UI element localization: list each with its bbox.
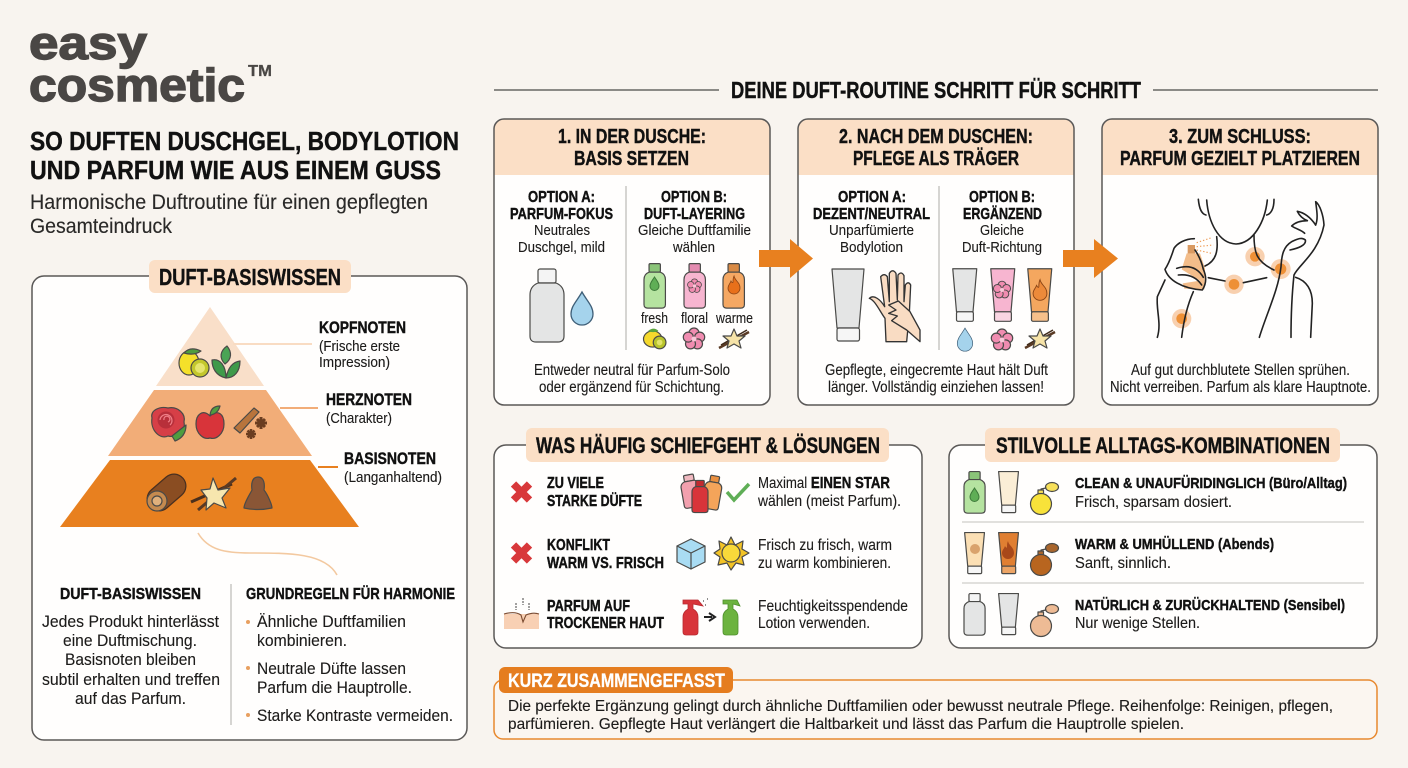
row: clean combination: Frisch, sparsam dosiert. <box>1075 494 1232 511</box>
step 1 caption <box>534 362 730 396</box>
step 2 caption: länger. Vollständig einziehen lassen! <box>828 379 1044 396</box>
step 1 caption: oder ergänzend für Schichtung. <box>539 379 724 396</box>
label: Kopfnoten <box>319 319 406 371</box>
title: UND PARFUM WIE AUS EINEM GUSS <box>30 157 441 185</box>
row: too many strong scents <box>514 473 901 513</box>
panel: step 2 <box>798 119 1074 405</box>
option B text: OPTION B: <box>969 189 1035 206</box>
text block: Grundregeln für Harmonie: GRUNDREGELN FÜR HARMONIE <box>246 584 455 603</box>
panel: Duft-Basiswissen <box>32 260 467 740</box>
option A text: Duschgel, mild <box>518 239 605 256</box>
option B text: Gleiche <box>980 222 1024 239</box>
heading: Stilvolle Alltags-Kombinationen <box>985 428 1340 462</box>
step 3 heading: 3. ZUM SCHLUSS: <box>1169 125 1311 148</box>
panel: step 1 <box>494 119 770 405</box>
title: SO DUFTEN DUSCHGEL, BODYLOTION <box>30 128 459 156</box>
row: perfume on dry skin: Lotion verwenden. <box>758 615 870 632</box>
label: Herznoten <box>326 391 412 427</box>
subtitle: Gesamteindruck <box>30 215 172 238</box>
step 3 caption <box>1110 362 1371 396</box>
row: clean combination: CLEAN & UNAUFÜRIDINGLICH (Büro/Alltag) <box>1075 475 1347 492</box>
option B text: DUFT-LAYERING <box>644 206 745 223</box>
icon: neutral tube and hands <box>832 269 920 342</box>
option A text: Neutrales <box>534 222 590 239</box>
connector curve <box>198 533 337 575</box>
row: warm vs fresh conflict: zu warm kombinieren. <box>758 555 891 572</box>
row: natural combination: NATÜRLICH & ZURÜCKHALTEND (Sensibel) <box>1075 597 1345 614</box>
step 1 caption: Entweder neutral für Parfum-Solo <box>534 362 730 379</box>
icon: three scented bottles with labels: warme <box>715 310 753 327</box>
summary text: parfümieren. Gepflegte Haut verlängert die Haltbarkeit und lässt das Parfum die Hauptrolle spielen. <box>508 716 1184 733</box>
row: perfume on dry skin <box>504 598 908 635</box>
panel: step 3 <box>1102 119 1378 405</box>
option A text <box>510 189 613 256</box>
icon: lemon and mint <box>179 346 240 378</box>
summary text: Die perfekte Ergänzung gelingt durch ähnliche Duftfamilien oder bewusst neutrale Pflege. Reihenfolge: Reinigen, pflegen, <box>508 698 1333 715</box>
option A text: OPTION A: <box>528 189 595 206</box>
step 3 heading <box>1120 125 1360 170</box>
label: Kopfnoten: KOPFNOTEN <box>319 319 406 337</box>
option B text: wählen <box>672 239 715 256</box>
pyramid chart <box>60 307 359 527</box>
row: too many strong scents: wählen (meist Parfum). <box>757 493 901 510</box>
section heading: Deine Duft-Routine: DEINE DUFT-ROUTINE SCHRITT FÜR SCHRITT <box>731 77 1141 103</box>
label: Herznoten: (Charakter) <box>326 411 392 427</box>
option A text: Unparfümierte <box>829 222 914 239</box>
option B text <box>962 189 1042 256</box>
text block: Grundregeln für Harmonie <box>246 584 455 725</box>
option B text: Duft-Richtung <box>962 239 1042 256</box>
label: Basisnoten: (Langanhaltend) <box>344 470 442 486</box>
panel: common mistakes and solutions <box>494 428 922 648</box>
row: warm combination <box>965 533 1274 576</box>
icon: wood, vanilla and amber <box>147 477 272 511</box>
text block: Duft-Basiswissen: auf das Parfum. <box>75 690 186 708</box>
icon: three scented bottles with labels <box>641 264 753 349</box>
heading: Was häufig schiefgeht: WAS HÄUFIG SCHIEFGEHT & LÖSUNGEN <box>536 433 880 458</box>
panel: everyday combinations <box>949 428 1377 648</box>
illustration: perfume application points on neck and wrists <box>1157 199 1324 337</box>
row: warm vs fresh conflict: Frisch zu frisch, warm <box>758 537 892 554</box>
text block: Duft-Basiswissen: DUFT-BASISWISSEN <box>60 586 201 603</box>
arrow: step 1 to 2 <box>759 239 813 278</box>
icon: three scented bottles with labels: fresh <box>641 310 668 327</box>
option A text: PARFUM-FOKUS <box>510 206 613 223</box>
label: Kopfnoten: Impression) <box>319 355 390 371</box>
heading: Duft-Basiswissen: DUFT-BASISWISSEN <box>159 264 341 290</box>
label: Kopfnoten: (Frische erste <box>319 339 400 355</box>
option A text <box>813 189 930 256</box>
subtitle <box>30 191 428 238</box>
heading: Was häufig schiefgeht <box>526 428 889 462</box>
step 1 heading: 1. IN DER DUSCHE: <box>558 125 706 148</box>
step 2 heading <box>839 125 1033 170</box>
row: clean combination <box>964 472 1347 514</box>
text block: Grundregeln für Harmonie: Ähnliche Duftfamilien <box>257 613 406 631</box>
text block: Duft-Basiswissen <box>42 586 220 708</box>
row: warm vs fresh conflict: KONFLIKT <box>547 537 610 554</box>
row: perfume on dry skin: Feuchtigkeitsspendende <box>758 598 908 615</box>
row: warm combination: WARM & UMHÜLLEND (Abends) <box>1075 536 1274 553</box>
text block: Grundregeln für Harmonie: Starke Kontraste vermeiden. <box>257 707 453 725</box>
step 1 heading <box>558 125 706 170</box>
step 2 caption <box>825 362 1049 396</box>
logo: easy cosmetic: cosmetic <box>29 59 245 111</box>
logo: easy cosmetic: easy <box>29 17 147 69</box>
heading: Stilvolle Alltags-Kombinationen: STILVOLLE ALLTAGS-KOMBINATIONEN <box>996 433 1330 458</box>
icon: neutral bottle and water drop <box>530 269 593 342</box>
row: natural combination <box>964 594 1345 636</box>
text block: Duft-Basiswissen: Jedes Produkt hinterlässt <box>42 613 219 631</box>
arrow: step 2 to 3 <box>1063 239 1118 278</box>
summary text <box>508 698 1333 733</box>
step 2 heading: PFLEGE ALS TRÄGER <box>853 147 1019 170</box>
label: Basisnoten <box>344 450 442 486</box>
option A text: DEZENT/NEUTRAL <box>813 206 930 223</box>
option B text <box>638 189 751 256</box>
step 1 heading: BASIS SETZEN <box>574 147 689 170</box>
title <box>30 128 459 185</box>
option A text: OPTION A: <box>838 189 906 206</box>
option B text: Gleiche Duftfamilie <box>638 222 751 239</box>
logo: easy cosmetic: TM <box>248 63 272 80</box>
logo: easy cosmetic <box>29 17 272 111</box>
row: too many strong scents: Maximal EINEN STAR <box>758 475 890 492</box>
text block: Grundregeln für Harmonie: Neutrale Düfte lassen <box>257 660 406 678</box>
subtitle: Harmonische Duftroutine für einen gepflegten <box>30 191 428 214</box>
option B text: OPTION B: <box>661 189 727 206</box>
row: too many strong scents: ZU VIELE <box>547 475 604 492</box>
text block: Grundregeln für Harmonie: kombinieren. <box>257 632 347 650</box>
step 3 caption: Nicht verreiben. Parfum als klare Hauptnote. <box>1110 379 1371 396</box>
panel: summary <box>494 667 1377 739</box>
row: warm vs fresh conflict: WARM VS. FRISCH <box>547 555 664 572</box>
icon: rose, apple, cinnamon and star anise <box>152 406 267 441</box>
option B text: ERGÄNZEND <box>963 206 1042 223</box>
step 3 caption: Auf gut durchblutete Stellen sprühen. <box>1131 362 1350 379</box>
label: Basisnoten: BASISNOTEN <box>344 450 436 468</box>
icon: three scented bottles with labels: floral <box>681 310 708 327</box>
label: Herznoten: HERZNOTEN <box>326 391 412 409</box>
text block: Duft-Basiswissen: subtil erhalten und treffen <box>42 671 220 689</box>
heading: Duft-Basiswissen <box>149 260 351 293</box>
row: too many strong scents: STARKE DÜFTE <box>547 493 642 510</box>
summary badge: KURZ ZUSAMMENGEFASST <box>508 671 725 692</box>
row: warm combination: Sanft, sinnlich. <box>1075 555 1171 572</box>
option A text: Bodylotion <box>840 239 903 256</box>
row: natural combination: Nur wenige Stellen. <box>1075 615 1200 632</box>
text block: Grundregeln für Harmonie: Parfum die Hauptrolle. <box>257 679 412 697</box>
row: perfume on dry skin: PARFUM AUF <box>547 598 630 615</box>
step 2 heading: 2. NACH DEM DUSCHEN: <box>839 125 1033 148</box>
text block: Duft-Basiswissen: eine Duftmischung. <box>63 632 197 650</box>
row: warm vs fresh conflict <box>514 537 892 572</box>
text block: Duft-Basiswissen: Basisnoten bleiben <box>65 651 196 669</box>
icon: three tubes with scent symbols <box>953 269 1055 351</box>
row: perfume on dry skin: TROCKENER HAUT <box>547 615 664 632</box>
step 2 caption: Gepflegte, eingecremte Haut hält Duft <box>825 362 1049 379</box>
